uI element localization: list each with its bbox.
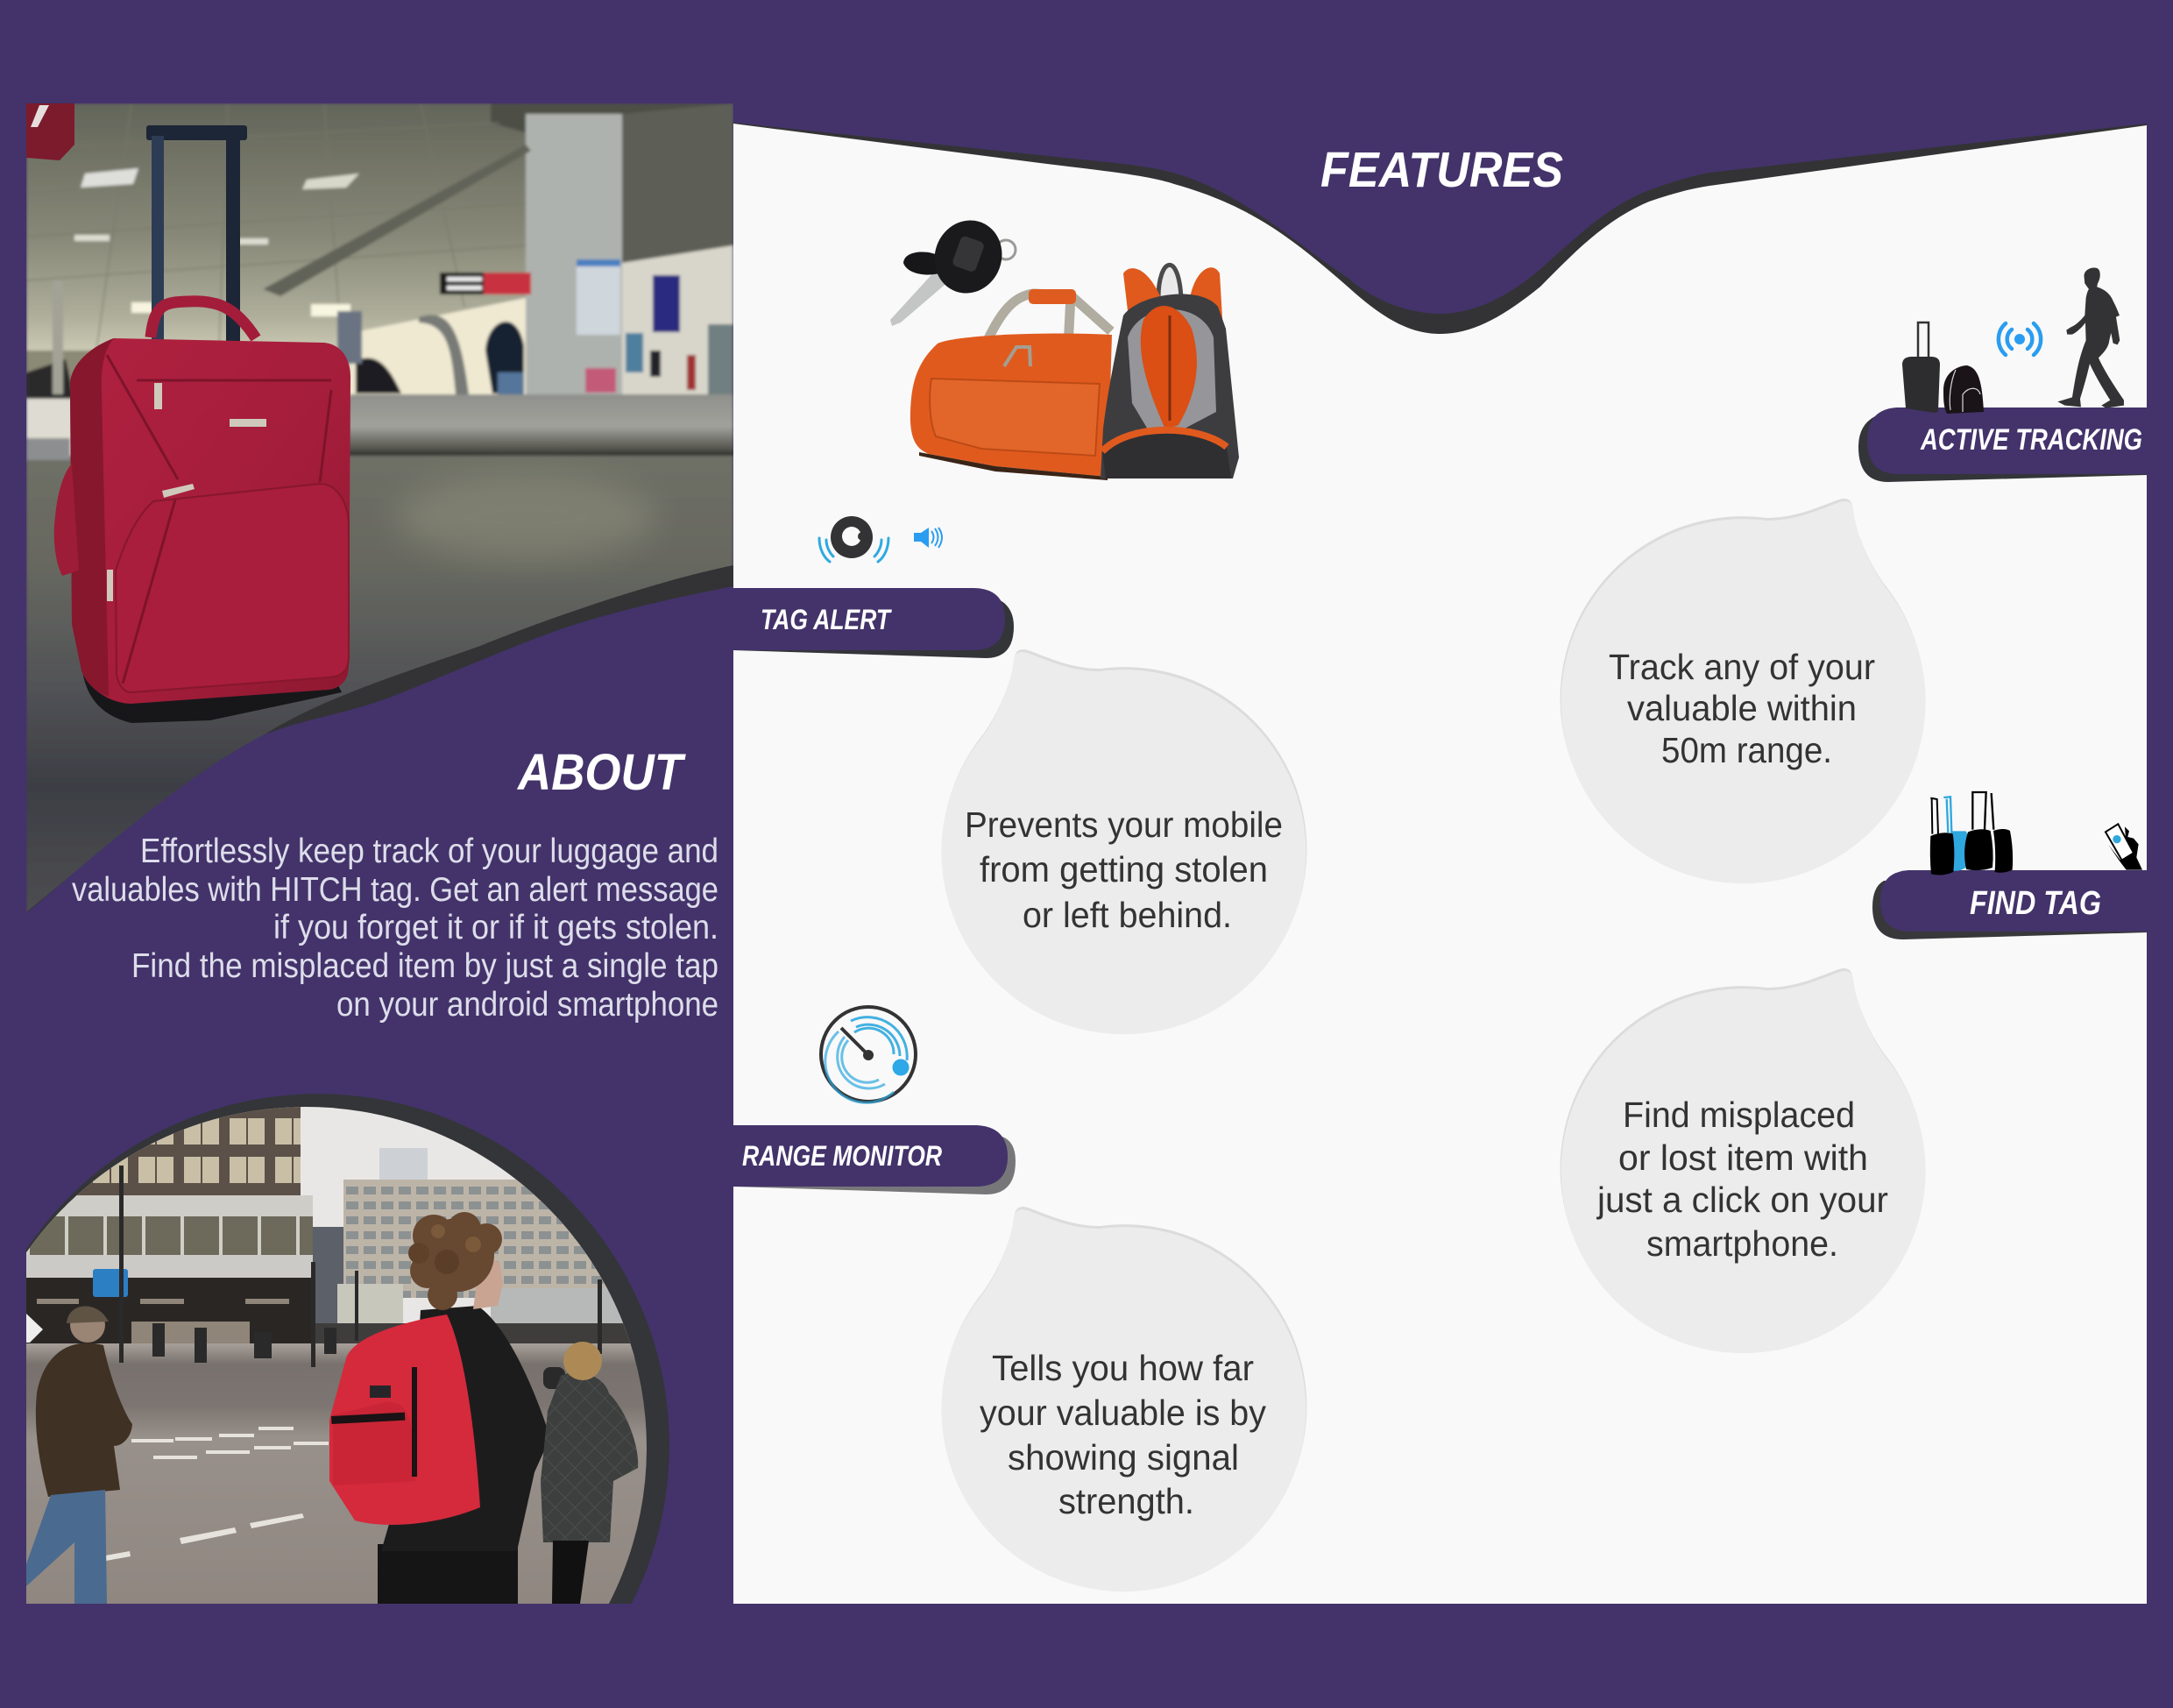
- orange duffel: [910, 333, 1112, 477]
- blue suitcase: [1943, 797, 1951, 833]
- bubble rim: [1561, 968, 1925, 1350]
- heading: features: FEATURES: [1320, 142, 1563, 198]
- telescopic handle: [146, 125, 247, 346]
- tag disc: [831, 516, 873, 558]
- suitcase side panel: [70, 338, 114, 697]
- text: prevents theft: or left behind.: [1023, 895, 1232, 935]
- radar needle: [841, 1028, 868, 1055]
- image: car key, orange duffel and backpack: [890, 211, 1239, 480]
- backpack pocket trim: [1102, 430, 1227, 451]
- front pocket: [116, 484, 349, 692]
- icon: hand holding phone: [2106, 824, 2142, 870]
- leather jacket: [381, 1306, 550, 1551]
- icon: row of suitcases: [1930, 792, 2013, 875]
- radar blip: [892, 1059, 910, 1076]
- banner body: [1880, 870, 2147, 932]
- panel: features header: [733, 105, 2147, 314]
- suitcase body: [70, 338, 350, 704]
- black trousers: [378, 1544, 518, 1605]
- icon: walking person: [2057, 268, 2124, 408]
- suitcase shadow and wheels: [82, 674, 342, 723]
- street scene: [26, 1095, 653, 1605]
- black suitcases: [1930, 798, 1938, 834]
- car key: [890, 211, 1016, 326]
- text: signal strength: strength.: [1058, 1481, 1194, 1521]
- backpack straps: [1123, 267, 1223, 333]
- radar ring: [821, 1007, 916, 1102]
- speech bubble: prevents theft: [941, 649, 1306, 1034]
- icon: speaker: [914, 528, 942, 548]
- subway sign: [93, 1269, 128, 1297]
- banner shadow: [733, 1136, 1016, 1194]
- shopfront details: [37, 1299, 289, 1346]
- text: find item: [1596, 1095, 1888, 1264]
- curly hair: [408, 1212, 502, 1310]
- backpack lower pocket: [1102, 430, 1231, 478]
- text: tracking range: Track any of your: [1609, 647, 1875, 687]
- banner label: RANGE MONITOR: [742, 1140, 942, 1172]
- crossing dashes: [105, 1427, 329, 1561]
- text: prevents theft: [965, 804, 1283, 935]
- banner body: [727, 588, 1005, 650]
- banner body: [1867, 408, 2147, 474]
- tag sound waves: [819, 538, 888, 562]
- icon: range monitor radar: [821, 1007, 916, 1102]
- text: about description: valuables with HITCH tag. Get an alert message: [72, 871, 718, 909]
- heading: about: ABOUT: [516, 744, 686, 801]
- text: prevents theft: Prevents your mobile: [965, 804, 1283, 845]
- face: [473, 1258, 503, 1309]
- carry handle: [151, 301, 256, 338]
- text: about description: on your android smartphone: [336, 986, 718, 1024]
- text: tracking range: valuable within: [1627, 688, 1857, 728]
- text: signal strength: your valuable is by: [980, 1393, 1266, 1433]
- bubble rim: [1561, 499, 1925, 881]
- street level right: [337, 1284, 403, 1336]
- icon: backpack silhouette: [1943, 365, 1984, 414]
- sign slash: [31, 105, 49, 127]
- bubble rim: [942, 1207, 1306, 1589]
- side pocket: [54, 464, 79, 576]
- airport background: [26, 103, 733, 914]
- text: signal strength: showing signal: [1008, 1437, 1239, 1478]
- duffel handles: [978, 294, 1111, 365]
- text: find item: Find misplaced: [1623, 1095, 1855, 1135]
- banner label: FIND TAG: [1970, 885, 2101, 922]
- woman in quilted coat: [541, 1342, 638, 1604]
- text: about description: if you forget it or if it gets stolen.: [273, 909, 718, 946]
- photo: red suitcase at airport baggage claim: [26, 103, 733, 914]
- duffel base shadow: [919, 452, 1108, 480]
- banner: find tag: [1872, 870, 2147, 939]
- text: find item: or lost item with: [1618, 1137, 1868, 1178]
- tower: [379, 1148, 428, 1180]
- bubble fill: [941, 1209, 1306, 1591]
- backpack top loop: [1158, 265, 1181, 298]
- panel: about curved background: [26, 586, 733, 1052]
- duffel pocket: [930, 379, 1100, 456]
- text: signal strength: [980, 1348, 1266, 1521]
- text: find item: smartphone.: [1646, 1223, 1838, 1264]
- icon: tag alert with sound waves: [819, 516, 888, 562]
- text: about description: [72, 833, 718, 1024]
- text: about description: Find the misplaced item by just a single tap: [131, 947, 718, 985]
- banner shadow: [1858, 416, 2147, 482]
- curve: dark edge of about panel: [26, 565, 733, 964]
- text: prevents theft: from getting stolen: [980, 849, 1268, 889]
- tag notch: [858, 532, 867, 541]
- panel: features background: [733, 114, 2147, 1604]
- hand: [2108, 826, 2142, 870]
- road and pavement: [26, 1343, 653, 1604]
- floor reflection: [394, 473, 657, 561]
- speech bubble: signal strength: [941, 1207, 1306, 1591]
- backpack orange centre: [1141, 306, 1197, 429]
- baggage carousel: [349, 394, 733, 458]
- backpack zip: [1169, 315, 1171, 421]
- duffel grip: [1029, 289, 1076, 304]
- white arrow fragment: [26, 1314, 43, 1343]
- duffel zip pulls: [1004, 347, 1030, 366]
- photo: traveller with red backpack in a circular crop: [26, 1094, 669, 1605]
- upper dark building: [26, 1106, 301, 1215]
- banner shadow: [733, 596, 1014, 658]
- low glass building: [26, 1195, 343, 1346]
- banner body: [727, 1125, 1008, 1187]
- text: signal strength: Tells you how far: [992, 1348, 1254, 1388]
- backpack grey wings: [1128, 309, 1216, 429]
- banner label: TAG ALERT: [761, 604, 892, 635]
- bubble fill: [941, 652, 1306, 1034]
- right building: [343, 1180, 609, 1298]
- text: about description: Effortlessly keep track of your luggage and: [140, 833, 718, 870]
- icon: broadcast signal: [1999, 323, 2041, 355]
- bubble fill: [1561, 971, 1926, 1353]
- phone: [2106, 824, 2134, 861]
- red backpack: [329, 1315, 480, 1525]
- banner: active tracking: [1858, 408, 2147, 482]
- tag hole: [842, 527, 861, 546]
- man in brown coat: [26, 1306, 132, 1604]
- red hanging sign: [26, 103, 74, 160]
- text: tracking range: [1609, 647, 1875, 770]
- radar arcs: [825, 1017, 907, 1102]
- speech bubble: find item: [1561, 968, 1926, 1353]
- text: find item: just a click on your: [1596, 1180, 1888, 1220]
- bubble rim: [942, 649, 1306, 1031]
- circular dark rim: [26, 1094, 669, 1604]
- sky: [26, 1095, 653, 1358]
- banner: range monitor: [727, 1125, 1016, 1194]
- phone eye mark: [2113, 835, 2121, 843]
- zip hardware: [107, 383, 266, 601]
- poles and small pedestrians: [119, 1166, 602, 1389]
- text: tracking range: 50m range.: [1661, 730, 1832, 770]
- curve: features header dark edge: [733, 114, 2147, 334]
- banner: tag alert: [727, 588, 1014, 658]
- icon: suitcase silhouette: [1902, 322, 1940, 413]
- speech bubble: tracking range: [1561, 499, 1926, 883]
- backpack body: [1101, 294, 1239, 478]
- banner shadow: [1872, 881, 2147, 939]
- radar hub: [863, 1050, 874, 1060]
- suitcase seams and zips: [107, 355, 331, 684]
- bubble fill: [1561, 501, 1926, 883]
